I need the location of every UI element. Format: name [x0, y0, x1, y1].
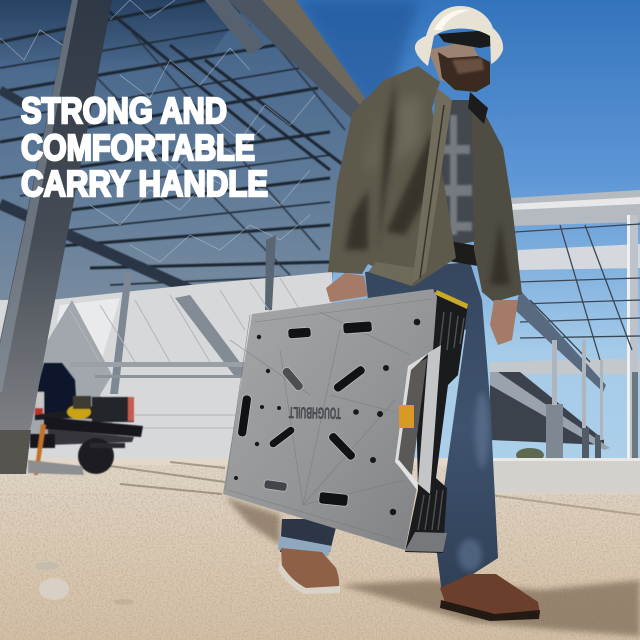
man: [278, 6, 540, 621]
background: right-side white steel frame: [490, 190, 640, 465]
ground shadows under the man: [225, 497, 640, 636]
panel slots: [237, 321, 372, 507]
belt: [430, 238, 478, 266]
neck and face: [428, 30, 491, 92]
heading: STRONG AND: [21, 90, 227, 131]
jacket: [328, 66, 522, 302]
hand on handle: [326, 273, 368, 302]
right hand: [490, 300, 518, 345]
left leg: [278, 519, 338, 556]
TOUGHBUILT logo upside down: TOUGHBUILT: [289, 403, 341, 421]
large foreground steel column: [0, 0, 112, 474]
tool box: side ribs behind panel: [405, 290, 468, 553]
jacket zipper placket: [412, 88, 452, 284]
orange latch: [399, 405, 414, 428]
background: steel roof structure: [0, 0, 362, 330]
tool box: grey panel with carry handle: [223, 289, 441, 550]
right boot: [440, 574, 540, 621]
handle cut-out recess: [395, 345, 441, 494]
heading: COMFORTABLE: [21, 127, 255, 168]
heading: [21, 90, 268, 204]
background: white warehouse wall: [0, 235, 332, 470]
white hard hat: [415, 6, 503, 66]
heading: CARRY HANDLE: [21, 163, 268, 204]
collar: [468, 92, 488, 124]
plaid shirt: [430, 100, 482, 250]
jeans right leg: [365, 262, 498, 594]
left boot: [278, 548, 340, 594]
jeans highlights: [458, 392, 489, 571]
sky shade near beam: [296, 0, 420, 130]
stones: [35, 562, 134, 605]
ground: sandy dirt: [0, 458, 640, 640]
panel bolt holes: [234, 319, 420, 515]
diagonal roof beam: [205, 0, 365, 122]
pickup truck with tools: [28, 363, 143, 475]
